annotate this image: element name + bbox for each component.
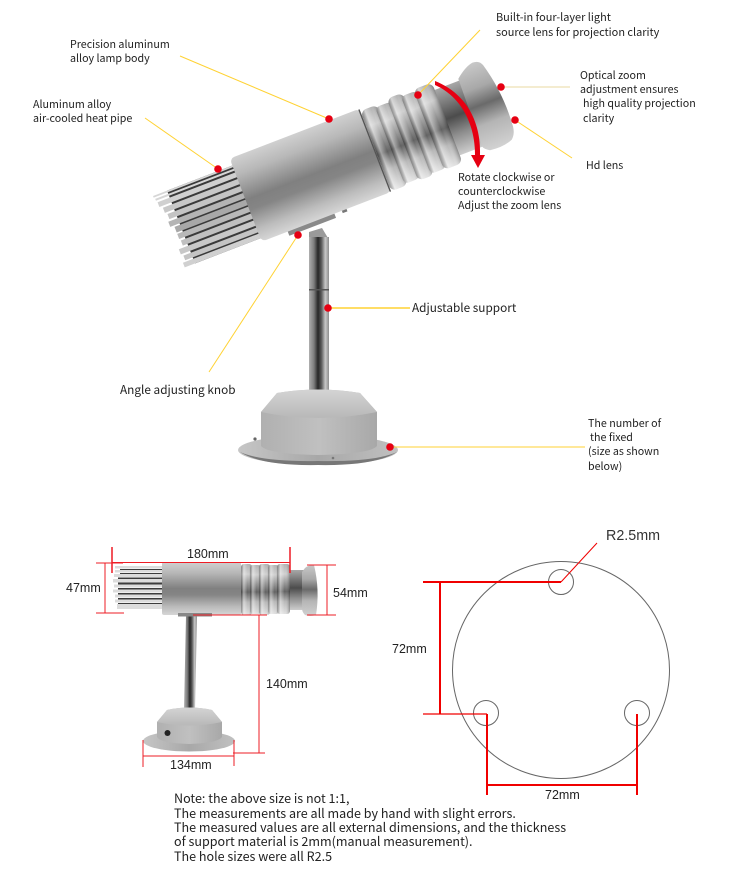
callout marker dots — [214, 83, 519, 451]
dimension drawing: side view lamp — [113, 562, 318, 752]
rotation arrow — [435, 81, 485, 168]
callout: rotate: Adjust the zoom lens — [458, 198, 561, 213]
lamp head, rotated about the tube axis — [149, 57, 522, 276]
small body — [162, 562, 241, 615]
callout: fixing holes: the fixed — [590, 430, 633, 445]
note text: The measurements are all made by hand with slight errors. — [174, 803, 516, 822]
callout: heat pipe: air-cooled heat pipe — [33, 111, 132, 126]
main product photo: projector lamp — [149, 57, 522, 465]
callout: heat pipe: Aluminum alloy — [33, 97, 112, 112]
callout: fixing holes: (size as shown — [588, 444, 659, 459]
small neck — [288, 570, 307, 610]
small ribs — [241, 564, 290, 615]
dimension: 180mm: 180mm — [187, 547, 229, 561]
heat pipe fins — [153, 163, 267, 269]
callout: lamp body: alloy lamp body — [70, 51, 150, 66]
callout: optical zoom: clarity — [583, 111, 615, 126]
dimension: vertical 72mm: 72mm — [392, 642, 427, 656]
note text: The hole sizes were all R2.5 — [174, 846, 332, 865]
dimension: 140mm: 140mm — [266, 677, 308, 691]
small pole — [184, 616, 197, 710]
ribbed zoom section — [360, 82, 463, 191]
note text: The measured values are all external dimensions, and the thickness — [174, 817, 566, 836]
dimension: 54mm: 54mm — [333, 586, 368, 600]
dimension: horizontal 72mm: 72mm — [545, 788, 580, 802]
callout: lamp body: Precision aluminum — [70, 37, 170, 52]
callout: adjustable support: Adjustable support — [412, 299, 517, 316]
dimension lines: side view — [96, 547, 336, 767]
callout: hd lens: Hd lens — [586, 158, 623, 173]
zoom head — [453, 57, 519, 153]
lens neck — [431, 79, 490, 157]
note text: Note: the above size is not 1:1, — [174, 788, 349, 807]
callout: optical zoom: Optical zoom — [580, 68, 646, 83]
small fins — [113, 566, 163, 609]
dimension: hole radius: R2.5mm — [606, 528, 660, 544]
knob bracket — [287, 212, 336, 236]
callout: fixing holes: The number of — [588, 416, 662, 431]
callout: rotate: Rotate clockwise or — [458, 170, 555, 185]
base with flange — [238, 390, 398, 465]
callout: lens: Built-in four-layer light — [496, 9, 611, 25]
mounting plate dimension lines — [423, 543, 637, 795]
callout: lens: source lens for projection clarity — [496, 24, 660, 40]
small base — [143, 708, 235, 752]
support pole — [309, 228, 329, 394]
small head — [302, 565, 318, 616]
callout: optical zoom: adjustment ensures — [580, 82, 679, 97]
dimension: 47mm: 47mm — [66, 581, 101, 595]
callout: rotate: counterclockwise — [458, 184, 545, 199]
dimension: 134mm: 134mm — [170, 758, 212, 772]
callout leader lines — [145, 30, 585, 447]
callout: optical zoom: high quality projection — [583, 96, 696, 111]
aluminum body — [230, 109, 391, 242]
callout: fixing holes: below) — [588, 459, 622, 474]
callout: angle knob: Angle adjusting knob — [120, 381, 236, 398]
note text: of support material is 2mm(manual measurement). — [174, 831, 473, 850]
mounting plate drawing — [452, 562, 670, 778]
